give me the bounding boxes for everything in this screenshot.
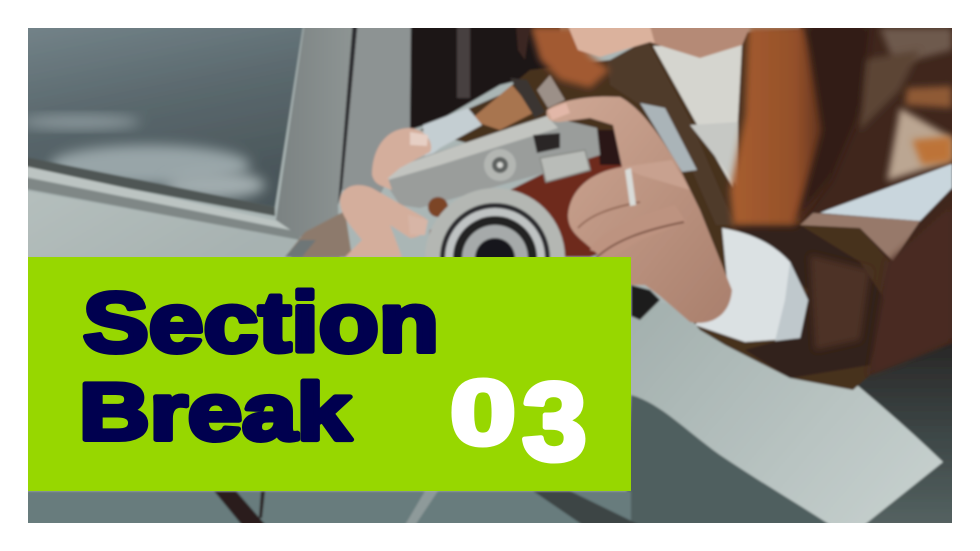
section number 03: 3 [522,361,587,484]
section number 03: 0 [450,362,516,464]
turtleneck shirt [653,45,742,188]
chin and neck [568,26,750,58]
camera [388,114,622,257]
jacket [285,20,960,390]
shirt cuff [695,228,808,342]
green title panel [28,257,631,491]
title line: Section: Section [83,276,439,370]
hands [340,97,732,323]
section number 03 [450,361,587,484]
long red hair [516,26,870,225]
title: Section Break [79,276,439,458]
car window with clouds [20,20,304,240]
title line: Break: Break [79,368,352,458]
door pillars and dark interior [276,20,560,260]
